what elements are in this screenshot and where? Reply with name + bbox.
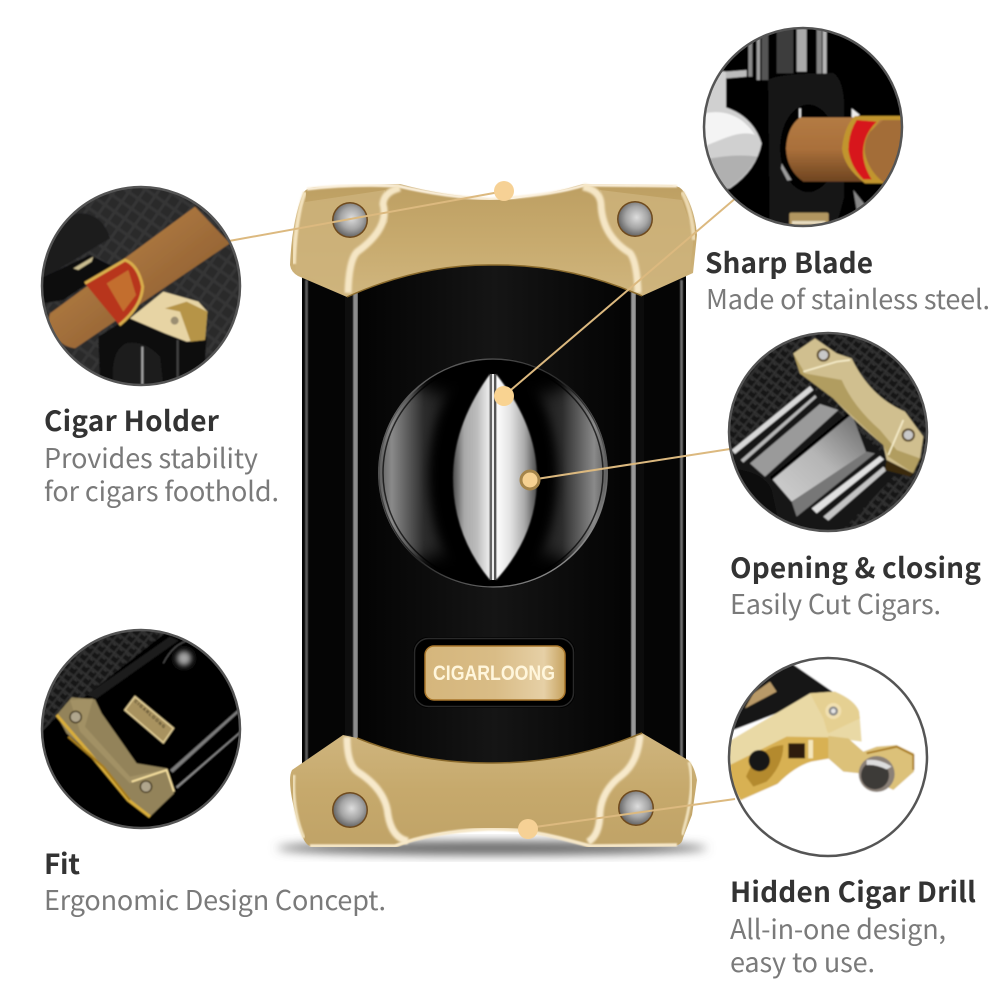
logo plate: CIGARLOONG — [433, 662, 555, 685]
photo circle: fit — [43, 631, 239, 827]
photo ring: cigar holder — [42, 187, 240, 385]
photo circle: opening and closing — [730, 334, 926, 530]
callout line: cigar holder — [229, 191, 505, 241]
cotton glove — [703, 70, 762, 193]
photo ring: hidden cigar drill — [729, 658, 927, 856]
dark cap at lower left — [738, 470, 777, 515]
blade left half — [453, 374, 490, 580]
text block: opening and closing — [730, 547, 981, 622]
top gold cap — [290, 184, 697, 297]
callout dot: blade centre — [521, 471, 539, 489]
logo plate small: CIGARLOONG — [133, 699, 167, 730]
cigar — [49, 207, 230, 348]
screw bottom left — [332, 792, 368, 828]
text block: cigar holder: Cigar Holder — [44, 400, 220, 440]
text block: fit: Fit — [44, 843, 80, 883]
gold body — [728, 692, 862, 801]
callout dot: blade tip — [494, 386, 514, 406]
gold bar — [57, 697, 174, 817]
photo ring: fit — [42, 630, 240, 828]
holes — [746, 745, 783, 787]
drill arm — [828, 736, 914, 790]
holder gold piece — [130, 292, 207, 342]
text block: cigar holder — [44, 400, 279, 509]
logo plate — [413, 637, 575, 708]
dial with blade — [378, 358, 608, 588]
text block: opening and closing: Opening & closing — [730, 547, 981, 587]
text block: opening and closing: Easily Cut Cigars. — [730, 583, 941, 622]
cigar — [784, 116, 884, 184]
photo circle: hidden cigar drill — [730, 665, 916, 801]
holder black base — [98, 317, 207, 387]
text block: hidden cigar drill: All-in-one design, — [730, 908, 946, 947]
screw top left — [332, 202, 368, 238]
photo ring: opening and closing — [729, 333, 927, 531]
cutter product illustration — [277, 184, 707, 855]
photo circle: cigar holder — [37, 185, 244, 389]
photo circle: sharp blade — [700, 25, 906, 231]
ground shadow — [277, 841, 707, 855]
screw top right — [617, 201, 653, 237]
photo ring: sharp blade — [704, 28, 902, 226]
callout dot: bottom cap — [518, 819, 538, 839]
text block: hidden cigar drill: easy to use. — [730, 941, 875, 980]
bottom gold cap — [290, 733, 697, 847]
text block: sharp blade: Sharp Blade — [705, 242, 873, 282]
callout line: opening and closing — [530, 449, 730, 480]
callout line: sharp blade — [505, 197, 737, 395]
gold bar — [793, 338, 923, 473]
screw bottom right — [618, 790, 654, 826]
text block: hidden cigar drill — [730, 871, 976, 980]
blade right half — [496, 374, 537, 580]
text block: fit: Ergonomic Design Concept. — [44, 879, 386, 918]
screw — [825, 703, 841, 719]
callout dot: top cap — [494, 181, 514, 201]
text block: fit — [44, 843, 386, 918]
callout line: hidden drill — [528, 799, 735, 828]
text block: cigar holder: Provides stability — [44, 437, 258, 476]
cutter body — [302, 255, 686, 790]
text block: hidden cigar drill: Hidden Cigar Drill — [730, 871, 976, 911]
text block: cigar holder: for cigars foothold. — [44, 470, 279, 509]
logo plate small — [125, 697, 173, 743]
text block: sharp blade — [705, 242, 990, 317]
drill bit — [859, 756, 895, 792]
text block: sharp blade: Made of stainless steel. — [706, 278, 990, 317]
